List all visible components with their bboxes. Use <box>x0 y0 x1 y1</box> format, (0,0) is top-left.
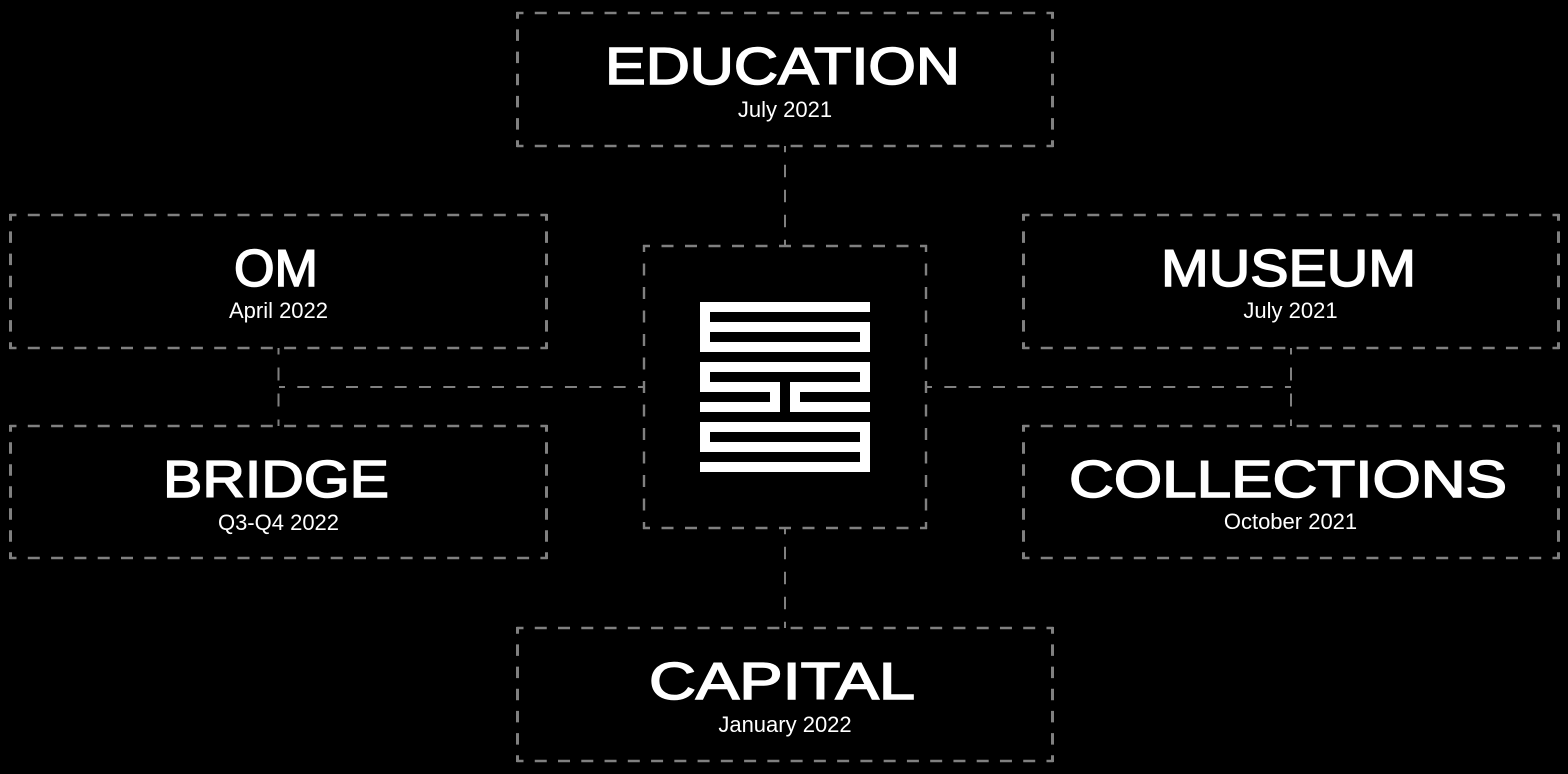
connector: museum and collections to centre <box>926 348 1291 426</box>
heading: museum: MUSEUM <box>1161 239 1416 297</box>
panel: capital <box>516 627 1054 762</box>
panel: education <box>516 12 1054 147</box>
heading: collections: COLLECTIONS <box>1069 450 1507 508</box>
panel: bridge <box>10 425 548 559</box>
date: capital: January 2022 <box>718 712 852 737</box>
heading: bridge: BRIDGE <box>163 450 389 508</box>
connector: education to centre <box>784 146 786 246</box>
dashed frame: capital <box>516 627 1054 762</box>
date: om: April 2022 <box>229 298 328 323</box>
panel: om <box>10 214 548 349</box>
dashed frame: om <box>10 214 548 349</box>
date: collections: October 2021 <box>1224 509 1357 534</box>
dashed frame: museum <box>1022 214 1560 349</box>
panel: collections <box>1022 425 1560 559</box>
heading: capital: CAPITAL <box>649 652 915 710</box>
dashed frame: education <box>516 12 1054 147</box>
connector: centre to capital <box>784 528 786 628</box>
date: education: July 2021 <box>738 97 832 122</box>
dashed frame: bridge <box>10 425 548 559</box>
connector: om and bridge to centre <box>278 348 644 426</box>
icon: maze logo <box>700 302 870 472</box>
panel: centre logo <box>643 245 927 529</box>
date: museum: July 2021 <box>1243 298 1338 323</box>
date: bridge: Q3-Q4 2022 <box>218 510 339 535</box>
heading: om: OM <box>234 239 318 297</box>
dashed frame: centre <box>643 245 927 529</box>
heading: education: EDUCATION <box>605 37 960 95</box>
dashed frame: collections <box>1022 425 1560 559</box>
panel: museum <box>1022 214 1560 349</box>
